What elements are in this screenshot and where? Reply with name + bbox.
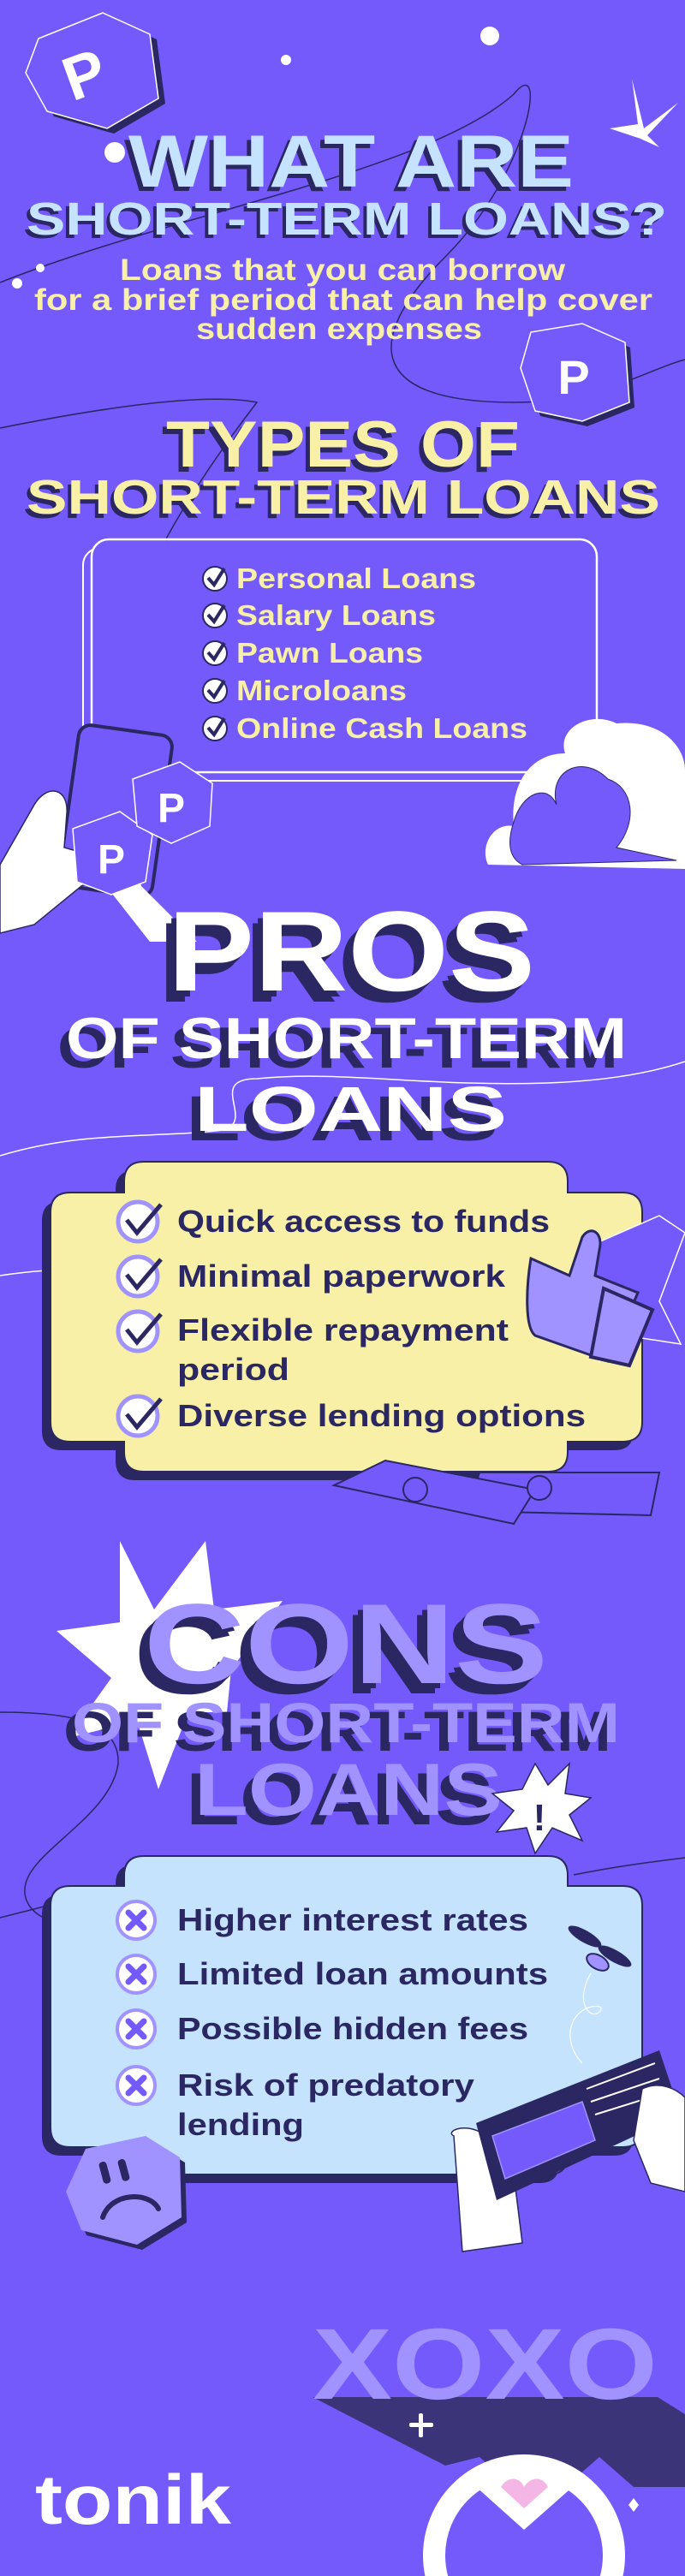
list: pros	[118, 1202, 586, 1436]
icon: sad face	[66, 2136, 187, 2250]
title: what are short-term loans: SHORT-TERM LOANS?	[23, 197, 664, 248]
panel: pros box	[42, 1162, 685, 1480]
heading: pros of short-term loans	[57, 889, 627, 1154]
heading: pros of short-term loans: LOANS	[186, 1083, 498, 1154]
logo: tonik: tonik	[35, 2461, 231, 2539]
icon: exclamation starburst: !	[533, 1797, 545, 1839]
list: loan types: Pawn Loans	[236, 637, 423, 669]
heading: cons of short-term loans: CONS	[139, 1586, 543, 1713]
list: pros: Diverse lending options	[177, 1398, 586, 1433]
list: cons: Limited loan amounts	[177, 1956, 548, 1991]
heading: cons of short-term loans: OF SHORT-TERM	[72, 1691, 620, 1754]
heading: types of short-term loans	[23, 408, 660, 529]
heading: types of short-term loans: TYPES OF	[166, 408, 520, 481]
icon: wallet with hands	[451, 2050, 685, 2252]
subtitle: Loans that you can borrow	[120, 253, 566, 287]
icon: P coin right	[521, 324, 634, 426]
icon: P coin right: P	[557, 350, 590, 404]
list: cons: Risk of predatory	[177, 2067, 474, 2103]
heading: xoxo	[313, 2308, 685, 2487]
decorative lines	[0, 86, 685, 1925]
heading: types of short-term loans: SHORT-TERM LOANS	[27, 470, 660, 525]
heading: xoxo: XOXO	[313, 2308, 658, 2421]
icon: money bills	[334, 1461, 659, 1524]
list: pros: Minimal paperwork	[177, 1258, 506, 1294]
heading: pros of short-term loans: PROS	[163, 895, 530, 1021]
panel: types list box	[83, 539, 597, 781]
list: loan types: Personal Loans	[236, 562, 476, 594]
list: loan types: Salary Loans	[236, 599, 436, 631]
title: what are short-term loans: SHORT-TERM LOANS?	[27, 193, 667, 245]
heading: cons of short-term loans: LOANS	[194, 1749, 503, 1831]
subtitle: for a brief period that can help cover	[34, 283, 652, 317]
heading: cons of short-term loans: CONS	[144, 1581, 548, 1708]
list: pros: period	[177, 1352, 289, 1387]
icon: cloud	[485, 719, 685, 869]
icon: dots and star	[12, 27, 678, 289]
heading: pros of short-term loans: PROS	[168, 889, 535, 1015]
heading: pros of short-term loans: OF SHORT-TERM	[66, 1006, 627, 1071]
icon: thumbs up	[527, 1216, 685, 1365]
icon: bee	[565, 1922, 634, 2063]
heading: cons of short-term loans: LOANS	[186, 1758, 494, 1841]
list: cons	[117, 1901, 548, 2142]
title: what are short-term loans	[23, 121, 667, 248]
icon: white starburst behind cons	[57, 1541, 283, 1789]
heading: cons of short-term loans: OF SHORT-TERM	[63, 1699, 611, 1763]
subtitle	[34, 253, 652, 346]
icon: exclamation starburst	[492, 1764, 591, 1853]
icon: phone with hands and coins: P	[98, 837, 125, 883]
icon: phone with hands and coins	[0, 723, 212, 942]
icon: P coin top left	[26, 13, 165, 134]
list: pros: Flexible repayment	[177, 1312, 509, 1347]
title: what are short-term loans: WHAT ARE	[124, 125, 569, 207]
list: loan types	[203, 562, 527, 744]
heading: pros of short-term loans: LOANS	[194, 1074, 507, 1145]
icon: heart hands	[434, 2460, 614, 2576]
heading: types of short-term loans: TYPES OF	[162, 413, 515, 486]
list: cons: lending	[177, 2107, 304, 2142]
heading: pros of short-term loans: OF SHORT-TERM	[57, 1015, 618, 1080]
subtitle: sudden expenses	[196, 312, 482, 346]
heading: cons of short-term loans: CONS	[134, 1591, 538, 1718]
panel: cons box	[42, 1856, 642, 2183]
heading: types of short-term loans: SHORT-TERM LOANS	[23, 474, 657, 529]
heading: cons of short-term loans	[63, 1581, 620, 1841]
list: loan types: Online Cash Loans	[236, 712, 527, 744]
icon: sparkle	[409, 2413, 639, 2512]
title: what are short-term loans: WHAT ARE	[128, 121, 574, 203]
icon: phone with hands and coins: P	[158, 786, 185, 831]
list: loan types: Microloans	[236, 675, 407, 706]
list: pros: Quick access to funds	[177, 1204, 550, 1239]
list: cons: Possible hidden fees	[177, 2011, 528, 2046]
list: cons: Higher interest rates	[177, 1902, 528, 1937]
icon: P coin top left: P	[54, 36, 116, 115]
heading: pros of short-term loans: PROS	[158, 900, 525, 1026]
